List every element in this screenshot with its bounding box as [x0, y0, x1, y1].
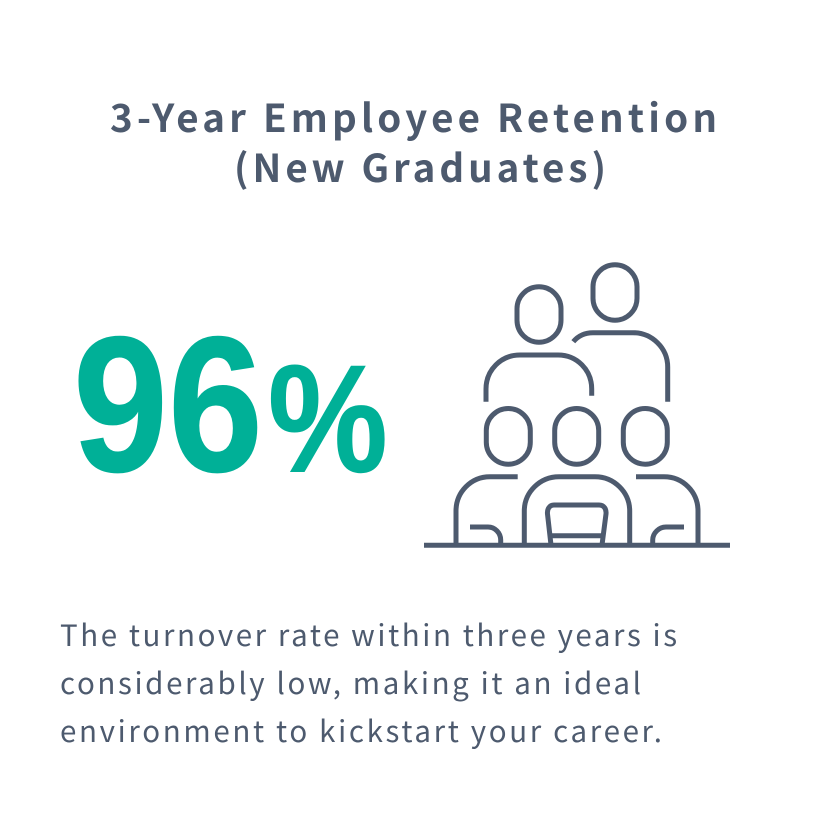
- big number: 96%: [73, 296, 388, 512]
- icon: front row bodies and hands: [456, 477, 698, 545]
- description text: The turnover rate within three years is: [60, 613, 677, 655]
- icon: front row heads: [486, 408, 667, 464]
- title: [110, 88, 717, 194]
- icon: laptop: [547, 505, 606, 545]
- title: 3-Year Employee Retention: [110, 88, 717, 144]
- icon: back row heads: [517, 265, 637, 342]
- big number: 96%: %: [268, 333, 388, 504]
- title: (New Graduates): [234, 138, 606, 194]
- description text: considerably low, making it an ideal: [60, 661, 641, 703]
- big number: 96%: 96: [73, 296, 263, 512]
- description text: [60, 613, 677, 751]
- icon: group of five people at a table with a laptop: [424, 265, 730, 545]
- description text: environment to kickstart your career.: [60, 709, 662, 751]
- icon: back row bodies: [486, 333, 668, 402]
- icon: table line: [424, 543, 730, 548]
